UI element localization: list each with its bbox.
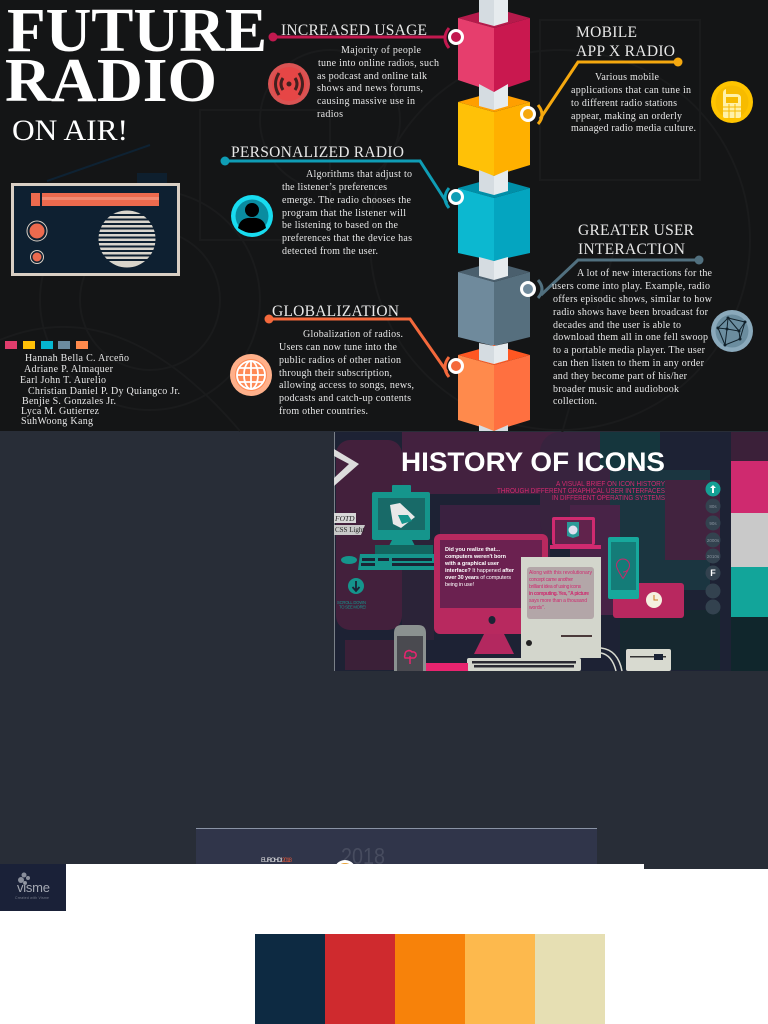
- body text: [317, 45, 439, 120]
- heading: INCREASED USAGE: [281, 22, 427, 39]
- body text: radios: [317, 109, 343, 120]
- section: mobile app x radio: [522, 24, 753, 134]
- colour palette swatches: [255, 934, 605, 1024]
- central cube column: [458, 0, 530, 431]
- connector line: [268, 28, 462, 48]
- title: RADIO: [5, 47, 217, 115]
- ribbon tags: CSS Light: [335, 526, 364, 534]
- body text: Majority of people: [341, 45, 422, 56]
- subtitle: ON AIR!: [12, 114, 128, 147]
- sidebar colour bands: [731, 432, 768, 671]
- timeline nav dots: 2010s: [707, 554, 720, 559]
- body text: program that the listener will: [282, 208, 406, 219]
- body text: collection.: [553, 396, 597, 407]
- body text: applications that can tune in: [571, 85, 691, 96]
- subheading: [497, 479, 665, 502]
- authors list: Lyca M. Gutierrez: [21, 406, 100, 417]
- white page area: [0, 864, 768, 1024]
- teal desktop computer: [341, 485, 442, 570]
- ribbon tags: FOTD: [334, 514, 355, 523]
- scroll prompt: [337, 578, 366, 610]
- panel: faded eurohdi slide: [196, 828, 597, 882]
- grey cube: [458, 257, 530, 346]
- timeline nav dots: 80s: [709, 504, 717, 509]
- body text: [552, 268, 713, 407]
- body text: download them all in one fell swoop: [553, 332, 708, 343]
- body text: from other countries.: [279, 406, 368, 417]
- pink laptop with clock icon: [550, 517, 601, 549]
- connector line: [264, 314, 462, 377]
- section: increased usage: [268, 22, 462, 120]
- visme badge: Created with Visme: [15, 896, 49, 900]
- body text: [282, 169, 412, 257]
- body text: [279, 329, 414, 417]
- yellow cube: [458, 84, 530, 176]
- body text: appear, making an orderly: [571, 111, 682, 122]
- small white device: [601, 648, 671, 671]
- icon: globe: [230, 354, 272, 396]
- body text: preferences that the device has: [282, 233, 412, 244]
- connector line: [522, 256, 704, 298]
- heading: APP X RADIO: [576, 43, 675, 60]
- connector line: [522, 58, 682, 124]
- body text: public radios of other nation: [279, 355, 401, 366]
- body text: A lot of new interactions for the: [577, 268, 713, 279]
- mac classic computer: words".: [529, 605, 545, 611]
- grey smartphone: [394, 625, 426, 671]
- ribbon tags: [334, 449, 365, 535]
- heading: [578, 222, 695, 258]
- mac classic computer: says more than a thousand: [529, 598, 587, 604]
- icon: network polygon: [711, 310, 753, 352]
- icon: person: [231, 195, 273, 237]
- pink imac with fact text: [434, 534, 548, 654]
- body text: radio shows have been broadcast for: [553, 307, 709, 318]
- fact text: Did you realize that...: [445, 547, 500, 553]
- icon: radio illustration: [12, 145, 178, 274]
- heading: GLOBALIZATION: [272, 303, 399, 320]
- scroll prompt: TO SEE MORE!: [339, 604, 366, 610]
- visme badge: [0, 864, 66, 911]
- body text: Globalization of radios.: [303, 329, 403, 340]
- authors list: Benjie S. Gonzales Jr.: [22, 396, 116, 407]
- mac classic computer: [521, 557, 601, 658]
- pink cube: [458, 0, 530, 92]
- body text: managed radio media culture.: [571, 123, 696, 134]
- subheading: THROUGH DIFFERENT GRAPHICAL USER INTERFACES: [497, 486, 665, 495]
- body text: [571, 72, 696, 134]
- authors list: Adriane P. Almaquer: [24, 364, 114, 375]
- section: personalized radio: [220, 144, 462, 257]
- body text: through their subscription,: [279, 368, 392, 379]
- body text: to a portable media player. The user: [553, 345, 706, 356]
- section: greater user interaction: [522, 222, 753, 407]
- body text: be listening to based on the: [282, 220, 399, 231]
- fact text: [444, 547, 515, 588]
- body text: Users can now tune into the: [279, 342, 398, 353]
- heading: PERSONALIZED RADIO: [231, 144, 404, 161]
- panel: faded eurohdi slide: EUROHDI 2018: [261, 858, 293, 864]
- fact text: interface? It happened after: [445, 568, 515, 574]
- keyboard: [467, 658, 581, 671]
- panel: faded eurohdi slide: 2018: [341, 843, 385, 869]
- body text: can then listen to them in any order: [553, 358, 705, 369]
- timeline nav dots: 2000s: [707, 538, 720, 543]
- body text: tune into online radios, such: [318, 58, 439, 69]
- body text: broader music and audiobook: [553, 384, 679, 395]
- body text: allowing access to songs, news,: [279, 380, 414, 391]
- mac classic computer: in computing. Yes, "A picture: [529, 591, 589, 597]
- fact text: over 30 years of computers: [445, 575, 511, 581]
- panel: history of icons: [334, 432, 768, 671]
- timeline nav dots: 90s: [709, 521, 717, 526]
- visme badge: visme: [17, 880, 50, 895]
- fact text: computers weren't born: [445, 554, 507, 560]
- icon: mobile phone: [711, 81, 753, 123]
- authors list: SuhWoong Kang: [21, 416, 93, 427]
- title: [5, 0, 267, 115]
- heading: HISTORY OF ICONS: [401, 447, 665, 477]
- body text: as podcast and online talk: [317, 71, 427, 82]
- body text: offers episodic shows, similar to how: [553, 294, 713, 305]
- body text: to different radio stations: [571, 98, 677, 109]
- body text: podcasts and catch-up contents: [279, 393, 411, 404]
- body text: users come into play. Example, radio: [552, 281, 710, 292]
- authors list: Christian Daniel P. Dy Quiangco Jr.: [28, 386, 180, 397]
- connector line: [220, 156, 462, 208]
- background shapes: [336, 432, 720, 670]
- legend colour squares: [5, 341, 88, 349]
- mac classic computer: Along with this revolutionary: [529, 570, 592, 576]
- authors list: Earl John T. Aurelio: [20, 375, 106, 386]
- subheading: A VISUAL BRIEF ON ICON HISTORY: [556, 479, 665, 488]
- mac classic computer: brilliant idea of using icons: [529, 584, 582, 590]
- body text: causing massive use in: [317, 96, 415, 107]
- heading: GREATER USER: [578, 222, 695, 239]
- timeline nav dots: [706, 482, 720, 614]
- orange cube: [458, 343, 530, 431]
- timeline nav dots: F: [710, 568, 716, 578]
- authors list: [20, 353, 180, 427]
- body text: Various mobile: [595, 72, 660, 83]
- body text: Algorithms that adjust to: [306, 169, 412, 180]
- body text: shows and news forums,: [317, 83, 423, 94]
- body text: the listener’s preferences: [282, 182, 387, 193]
- body text: decades and the user is able to: [553, 320, 681, 331]
- body text: emerge. The radio chooses the: [282, 195, 412, 206]
- heading: INTERACTION: [578, 241, 685, 258]
- teal tablet with map pin: [608, 537, 639, 599]
- section: globalization: [230, 303, 462, 417]
- body text: and they become part of his/her: [553, 371, 688, 382]
- body text: detected from the user.: [282, 246, 378, 257]
- pink bar: [416, 663, 468, 671]
- pink phone with clock: [613, 583, 684, 618]
- panel: future radio infographic: [0, 0, 768, 440]
- heading: MOBILE: [576, 24, 637, 41]
- fact text: being in use!: [445, 582, 474, 588]
- authors list: Hannah Bella C. Arceño: [25, 353, 129, 364]
- mac classic computer: concept came another: [529, 577, 573, 583]
- icon: broadcast: [268, 63, 310, 105]
- subheading: IN DIFFERENT OPERATING SYSTEMS: [552, 493, 665, 502]
- teal cube: [458, 170, 530, 261]
- scroll prompt: SCROLL DOWN: [337, 600, 366, 605]
- fact text: with a graphical user: [444, 561, 500, 567]
- heading: [576, 24, 675, 60]
